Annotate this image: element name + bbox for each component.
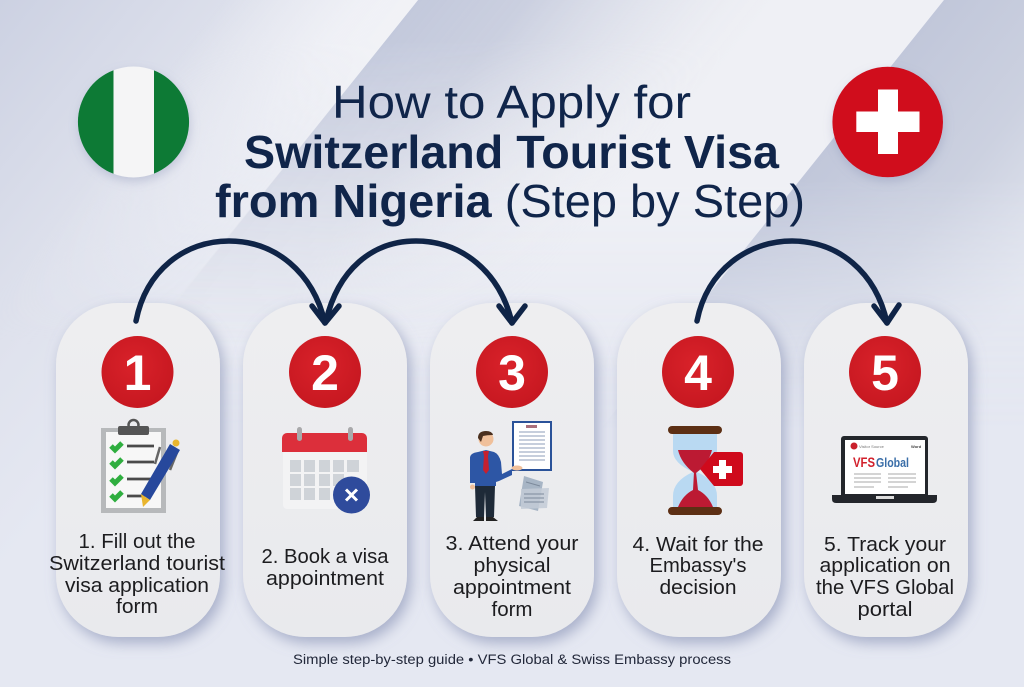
title: How to Apply for (332, 76, 691, 128)
number badge 3: 3 (498, 345, 526, 401)
step 5 text (816, 533, 954, 621)
number badge 2 (289, 336, 361, 408)
title: Switzerland Tourist Visa (244, 126, 779, 178)
title: from Nigeria (Step by Step) (215, 175, 805, 227)
number badge 5: 5 (871, 345, 899, 401)
step 5 text: the VFS Global (816, 576, 954, 599)
icon: laptop with VFS Global page (832, 436, 937, 503)
number badge 1 (102, 336, 174, 408)
icon: laptop with VFS Global page: VFS (853, 454, 875, 470)
arrow: step 4 to step 5 (697, 241, 899, 323)
step 5 text: 5. Track your (824, 533, 946, 556)
icon: laptop with VFS Global page: Global (876, 455, 909, 470)
number badge 3 (476, 336, 548, 408)
step 5 text: portal (858, 598, 912, 621)
number badge 4: 4 (684, 345, 712, 401)
step 1 text: 1. Fill out the (78, 530, 196, 553)
panel: step 2 (243, 303, 407, 637)
icon: man presenting document (470, 422, 551, 521)
step 2 text: appointment (266, 567, 384, 590)
step 3 text: appointment (453, 576, 571, 599)
icon: laptop with VFS Global page: Word (911, 444, 922, 449)
step 1 text: visa application (65, 574, 209, 597)
step 4 text (632, 533, 764, 599)
step 5 text: application on (820, 554, 950, 577)
panel: step 1 (49, 303, 225, 637)
icon: hourglass with Swiss tag (668, 426, 743, 515)
step 3 text: physical (474, 554, 550, 577)
icon: clipboard with checklist and pen (101, 420, 180, 513)
panel: step 3 (430, 303, 594, 637)
number badge 5 (849, 336, 921, 408)
footer caption: Simple step-by-step guide • VFS Global & Swiss Embassy process (293, 652, 731, 667)
arrow: step 1 to step 2 (136, 241, 339, 323)
number badge 4 (662, 336, 734, 408)
step 3 text: 3. Attend your (446, 532, 579, 555)
step 4 text: decision (660, 576, 736, 599)
panel: step 4 (617, 303, 781, 637)
icon: laptop with VFS Global page: Visitor Source (859, 444, 885, 449)
step 1 text (49, 530, 225, 618)
step 4 text: Embassy's (650, 554, 746, 577)
step 2 text: 2. Book a visa (262, 545, 389, 568)
step 3 text: form (492, 598, 532, 621)
flag: Switzerland (832, 67, 943, 177)
icon: calendar with cross (282, 427, 370, 514)
arrow: step 2 to step 3 (326, 241, 525, 323)
step 2 text (262, 545, 389, 590)
step 1 text: form (116, 595, 158, 618)
panel: step 5 (804, 303, 968, 637)
step 3 text (446, 532, 579, 621)
background (0, 0, 1024, 349)
flag: Nigeria (78, 66, 189, 178)
number badge 1: 1 (124, 345, 151, 401)
step 4 text: 4. Wait for the (632, 533, 764, 556)
number badge 2: 2 (311, 345, 339, 401)
step 1 text: Switzerland tourist (49, 552, 225, 575)
title (215, 76, 805, 227)
